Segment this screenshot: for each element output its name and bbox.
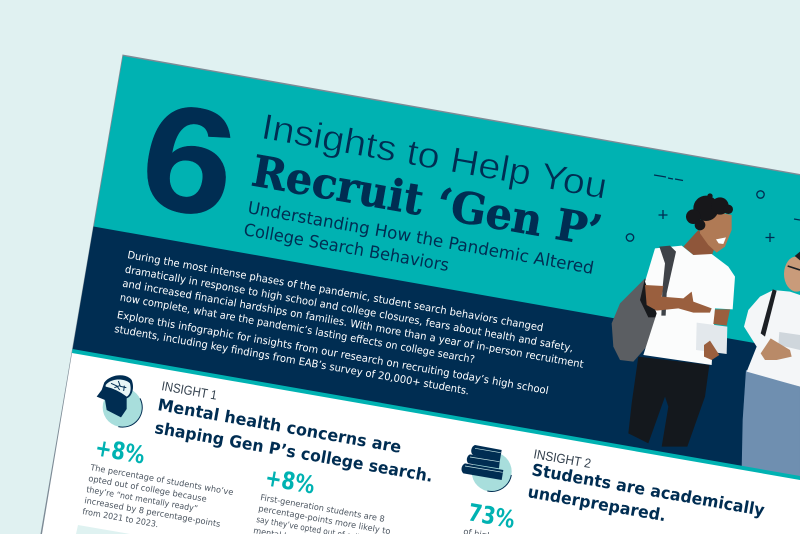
face [784, 256, 800, 292]
tablet [778, 332, 800, 350]
smile [716, 237, 726, 244]
hair [686, 193, 733, 230]
arm right [713, 309, 730, 326]
stat 2: +8% [263, 463, 317, 500]
insight 1 heading: Mental health concerns are [156, 395, 403, 457]
stat 1: +8% [93, 433, 147, 470]
hand on tablet [704, 341, 719, 360]
panel: intro navy band [72, 226, 800, 477]
hands [761, 338, 792, 360]
tablet [696, 323, 727, 354]
insight 1 heading: shaping Gen P’s college search. [153, 418, 434, 486]
intro text: During the most intense phases of the pandemic, student search behaviors changed [126, 249, 544, 334]
subtitle: Understanding How the Pandemic Altered [246, 198, 595, 279]
stat 1: opted out of college because [88, 473, 208, 504]
title line 2: Recruit ‘Gen P’ [248, 147, 605, 257]
insight 2 heading: underprepared. [526, 482, 667, 525]
stat 2 [253, 463, 391, 534]
insight 1 label: INSIGHT 1 [160, 378, 218, 403]
stat 1: they’re “not mentally ready” [86, 484, 199, 514]
backpack dark side [640, 278, 660, 317]
backpack strap [659, 246, 676, 316]
shirt [744, 290, 800, 387]
title line 1: Insights to Help You [259, 106, 610, 207]
subtitle: College Search Behaviors [242, 220, 451, 276]
intro text [113, 249, 584, 397]
panel: white content area [42, 350, 800, 534]
neck [683, 230, 715, 256]
forearm and hand [645, 285, 712, 313]
intro text: students, including key findings from EAB’s survey of 20,000+ students. [113, 323, 470, 397]
pants [628, 357, 709, 447]
intro text: Explore this infographic for insights from our research on recruiting today’s high school [116, 309, 549, 397]
stat 2: First-generation students are 8 [260, 492, 385, 524]
backpack [612, 278, 658, 362]
insight 2 heading: Students are academically [530, 460, 766, 520]
photo: female student [742, 253, 800, 480]
numeral 6: 6 [129, 70, 248, 251]
intro text: and increased financial hardships on families. With more than a year of in-person recruitment [121, 278, 584, 371]
photo: male student [612, 193, 735, 447]
divider stripe [72, 349, 800, 480]
stat 1: from 2021 to 2023. [82, 506, 159, 529]
stat 1: increased by 8 percentage-points [84, 495, 221, 529]
t-shirt [643, 246, 735, 365]
intro text: dramatically in response to high school and college closures, fears about health and safety, [124, 264, 574, 354]
stat 1 [82, 433, 234, 529]
ear and face [700, 212, 732, 253]
icon: head with brain [97, 375, 142, 427]
icon: stack of books [462, 445, 512, 492]
insight 1 heading [153, 395, 434, 486]
jeans [742, 370, 800, 480]
bag strap [761, 289, 777, 337]
hair and glasses [788, 253, 800, 270]
panel: header teal band [93, 56, 800, 357]
callout box [76, 525, 130, 534]
decorative marks [626, 175, 800, 242]
stat 1: The percentage of students who’ve [89, 462, 234, 497]
insight 2 label: INSIGHT 2 [532, 446, 592, 471]
intro text: now complete, what are the pandemic’s lasting effects on college search? [119, 292, 476, 366]
